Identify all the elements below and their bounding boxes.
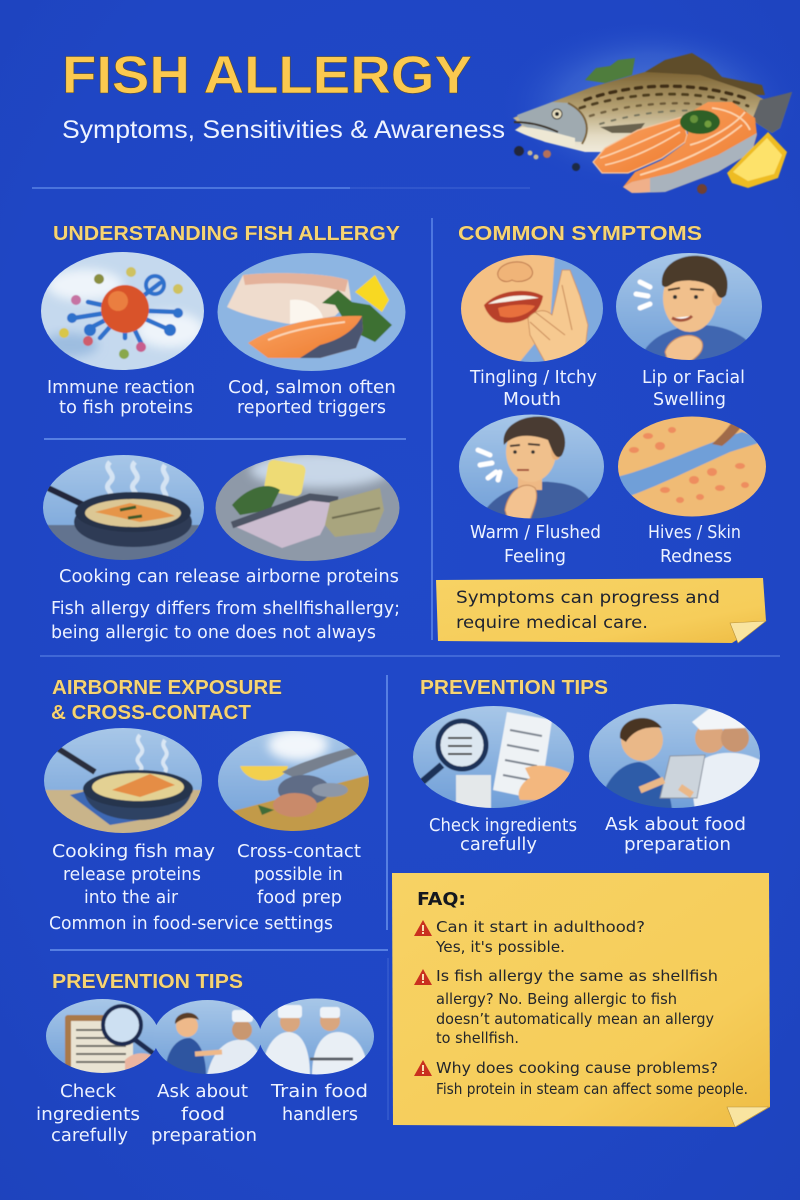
warning icon <box>414 1060 432 1076</box>
label: ask about food preparation: food <box>181 1105 225 1125</box>
label: warm flushed: Feeling <box>504 547 566 567</box>
label: tingling: Mouth <box>503 390 561 410</box>
label: cross-contact: possible in <box>254 865 343 885</box>
label: immune reaction: Immune reaction <box>47 378 195 398</box>
panel: understanding fish allergy <box>40 222 410 643</box>
question 3 <box>436 1059 748 1098</box>
heading: PREVENTION TIPS <box>52 970 243 993</box>
panel: common symptoms <box>436 222 768 643</box>
text block: fish vs shellfish: being allergic to one does not always <box>51 623 376 643</box>
panel: airborne exposure and cross-contact <box>42 676 372 934</box>
subtitle: Symptoms, Sensitivities & Awareness <box>62 116 505 144</box>
question 2: to shellfish. <box>436 1029 519 1047</box>
label: cooking fish <box>52 842 215 908</box>
text: food-service settings: Common in food-service settings <box>49 914 333 934</box>
label: check ingredients: Check ingredients <box>429 816 577 836</box>
illustration: fish, salmon steak and lemon <box>513 53 792 194</box>
warning icon <box>414 969 432 985</box>
heading: & CROSS-CONTACT <box>51 701 251 724</box>
label: train food handlers: handlers <box>282 1105 358 1125</box>
illustration: hives <box>618 416 766 516</box>
label: ask about food preparation <box>151 1082 257 1146</box>
label: triggers <box>228 378 396 418</box>
illustration: pan with steam <box>43 455 204 560</box>
label: ask about food preparation: preparation <box>151 1126 257 1146</box>
illustration: asking about preparation <box>587 702 763 810</box>
FAQ heading: FAQ: <box>417 890 466 910</box>
label: cooking fish: Cooking fish may <box>52 842 215 862</box>
label: immune reaction: to fish proteins <box>59 398 193 418</box>
label: swelling <box>642 368 745 410</box>
illustration: itchy mouth <box>458 252 606 364</box>
label: cross-contact <box>237 842 361 908</box>
label: check ingredients: ingredients <box>36 1105 140 1125</box>
label: train food handlers: Train food <box>270 1082 368 1102</box>
heading: AIRBORNE EXPOSURE <box>52 676 282 699</box>
question 1: Can it start in adulthood? <box>436 918 645 936</box>
label: tingling <box>469 368 597 410</box>
label: check ingredients <box>36 1082 140 1146</box>
label: train food handlers <box>270 1082 368 1125</box>
label: ask about food: Ask about food <box>605 815 746 835</box>
label: hives <box>648 523 741 567</box>
warning icon <box>414 920 432 936</box>
question 2 <box>436 967 718 1047</box>
label: cross-contact: food prep <box>257 888 342 908</box>
label: warm flushed: Warm / Flushed <box>470 523 601 543</box>
callout: symptoms progress <box>436 578 766 643</box>
soft glow behind fish <box>500 20 800 190</box>
question 1 <box>435 918 645 956</box>
illustration: training chefs <box>260 998 374 1074</box>
heading: UNDERSTANDING FISH ALLERGY <box>53 222 400 245</box>
illustration: frying pan <box>42 726 204 836</box>
question 2: Is fish allergy the same as shellfish <box>436 967 718 985</box>
illustration: raw fish and parchment <box>214 452 402 564</box>
label: check ingredients: Check <box>60 1082 117 1102</box>
label: check ingredients: carefully <box>51 1126 128 1146</box>
heading <box>51 676 282 724</box>
label: ask about food: preparation <box>624 835 731 855</box>
callout: symptoms progress: Symptoms can progress and <box>456 588 720 607</box>
label: ask about food preparation: Ask about <box>157 1082 248 1102</box>
illustration: immune cell <box>40 250 205 372</box>
label: swelling: Swelling <box>653 390 726 410</box>
text block: fish vs shellfish: Fish allergy differs from shellfishallergy; <box>51 599 400 619</box>
label: swelling: Lip or Facial <box>642 368 745 388</box>
text block: fish vs shellfish <box>51 599 400 643</box>
illustration: warm flushed <box>456 412 608 522</box>
question 2: doesn’t automatically mean an allergy <box>436 1010 714 1028</box>
label: check ingredients: carefully <box>460 835 537 855</box>
callout: symptoms progress: require medical care. <box>456 613 648 632</box>
illustration: cod and salmon <box>215 250 410 374</box>
label: cooking airborne: Cooking can release airborne proteins <box>59 567 399 587</box>
question 3: Fish protein in steam can affect some people. <box>436 1080 748 1098</box>
label: hives: Redness <box>660 547 732 567</box>
title: FISH ALLERGY <box>62 46 472 105</box>
label: triggers: reported triggers <box>237 398 386 418</box>
panel: prevention tips right <box>411 676 763 855</box>
question 2: allergy? No. Being allergic to fish <box>436 990 677 1008</box>
illustration: asking chef <box>156 1000 260 1074</box>
label: check ingredients <box>429 816 577 855</box>
illustration: cross-contact on board <box>216 729 372 835</box>
label: hives: Hives / Skin <box>648 523 741 543</box>
label: cross-contact: Cross-contact <box>237 842 361 862</box>
label: tingling: Tingling / Itchy <box>469 368 597 388</box>
label: cooking fish: into the air <box>84 888 179 908</box>
question 1: Yes, it's possible. <box>435 938 565 956</box>
illustration: magnifier and label <box>411 704 578 810</box>
heading: PREVENTION TIPS <box>420 676 608 699</box>
header <box>62 20 800 194</box>
question 3: Why does cooking cause problems? <box>436 1059 718 1077</box>
illustration: ingredient check <box>46 999 156 1073</box>
label: cooking fish: release proteins <box>63 865 201 885</box>
illustration: lip or facial swelling <box>614 250 765 362</box>
panel: FAQ note <box>392 873 770 1127</box>
panel: prevention tips left <box>36 970 377 1146</box>
label: warm flushed <box>470 523 601 567</box>
label: immune reaction <box>47 378 195 418</box>
label: triggers: Cod, salmon often <box>228 378 396 398</box>
label: ask about food <box>605 815 746 855</box>
heading: COMMON SYMPTOMS <box>458 222 702 245</box>
